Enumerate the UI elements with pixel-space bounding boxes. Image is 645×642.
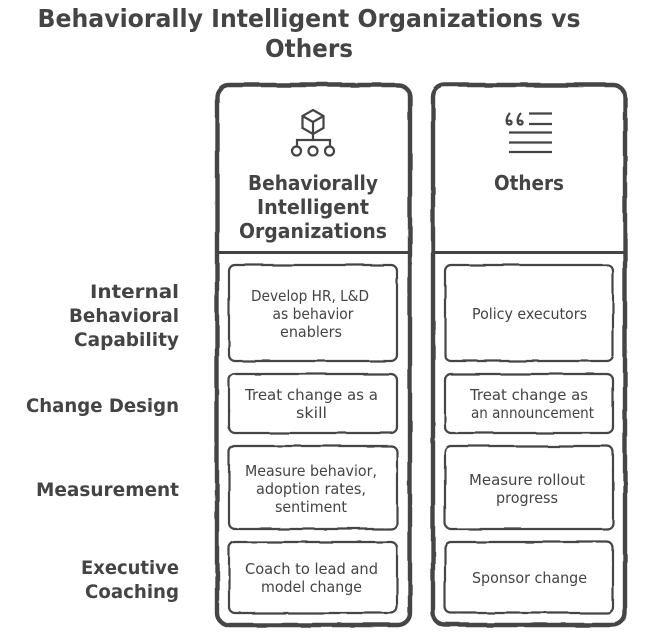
card: Measure behavior: Measure behavior, (245, 462, 377, 480)
card: Treat change as an announcement (445, 374, 613, 433)
card: Treat change as a skill: Treat change as a (244, 386, 378, 404)
card: Develop HR, L&D: Develop HR, L&D (251, 287, 369, 305)
label: Executive Coaching: Executive (81, 557, 179, 579)
card: Measure behavior: sentiment (275, 498, 347, 516)
label: Internal Behavioral Capability: Capability (74, 329, 180, 351)
heading (239, 171, 387, 243)
label: Internal Behavioral Capability (69, 281, 180, 351)
card: Policy executors (445, 265, 613, 361)
panel: Behaviorally Intelligent Organizations (217, 85, 410, 625)
card: Treat change as an announcement: Treat change as (469, 386, 588, 404)
label: Executive Coaching (81, 557, 179, 603)
row labels (26, 281, 180, 603)
panel: Others (433, 85, 625, 625)
label: Executive Coaching: Coaching (85, 581, 179, 603)
card: Sponsor change (445, 542, 613, 613)
card: Coach to lead (229, 542, 397, 613)
icon: cube hierarchy (292, 110, 334, 156)
card: Policy executors: Policy executors (472, 305, 587, 323)
heading: Others (494, 171, 564, 195)
card: Develop HR, L&D (229, 265, 397, 361)
card: Measure rollout progress: Measure rollout (469, 471, 585, 489)
card: Sponsor change: Sponsor change (472, 569, 587, 587)
title (38, 4, 580, 63)
heading: Organizations (239, 219, 387, 243)
card: Measure rollout progress (445, 446, 613, 529)
icon: quote and lines (507, 113, 552, 152)
card: Develop HR, L&D: enablers (280, 323, 342, 341)
card: Treat change as a skill (229, 374, 397, 433)
label: Internal Behavioral Capability: Behavioral (69, 305, 179, 327)
card: Develop HR, L&D: as behavior (272, 305, 354, 323)
card: Measure behavior (229, 446, 397, 529)
card: Measure behavior: adoption rates, (256, 480, 366, 498)
card: Treat change as a skill: skill (296, 404, 327, 422)
card: Treat change as an announcement: an announcement (471, 404, 594, 422)
label: Internal Behavioral Capability: Internal (90, 281, 179, 303)
card: Coach to lead: Coach to lead and (245, 560, 378, 578)
title: Others (265, 34, 353, 63)
label: Change Design: Change Design (26, 395, 179, 417)
label: Measurement: Measurement (36, 479, 179, 501)
card: Measure rollout progress: progress (496, 489, 558, 507)
heading: Intelligent (257, 195, 369, 219)
heading: Behaviorally (248, 171, 378, 195)
card: Coach to lead: model change (261, 578, 362, 596)
title: Behaviorally Intelligent Organizations vs (38, 4, 580, 33)
